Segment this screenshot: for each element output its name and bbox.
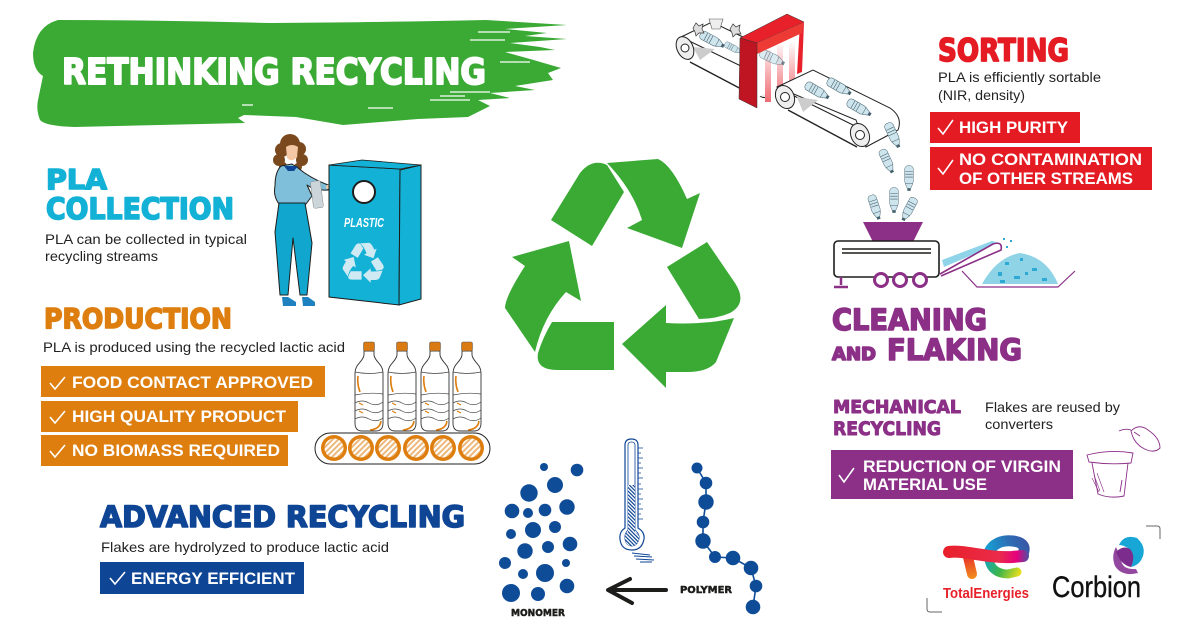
heading: PLA collection — [46, 163, 234, 226]
panel: cleaning and flaking — [831, 303, 1120, 499]
badge: no contamination: OF OTHER STREAMS — [959, 169, 1133, 188]
icon: small recycling symbol — [343, 243, 384, 283]
bottles: moving on second belt and falling — [803, 77, 919, 222]
diagram: polymer chain — [680, 462, 762, 614]
text: Corbion wordmark: Corbion — [1052, 571, 1141, 604]
heading: advanced recycling: ADVANCED RECYCLING — [100, 500, 465, 534]
illustration: sorting conveyor — [673, 14, 919, 222]
heading: cleaning and flaking: AND — [832, 344, 876, 365]
text: plastic label: PLASTIC — [344, 215, 384, 230]
text: production description: PLA is produced using the recycled lactic acid — [43, 339, 345, 355]
heading: rethinking recycling: RETHINKING RECYCLING — [62, 52, 486, 93]
icon: thermometer — [620, 439, 654, 562]
text: mechanical recycling description — [985, 399, 1120, 432]
text: TotalEnergies wordmark: TotalEnergies — [943, 585, 1029, 602]
badge: high purity — [930, 112, 1080, 143]
text: sorting description: PLA is efficiently sortable — [938, 69, 1101, 85]
badge: high quality product — [41, 401, 298, 432]
badge: energy efficient: ENERGY EFFICIENT — [131, 569, 296, 588]
badge: no contamination — [930, 147, 1152, 190]
logo: TotalEnergies — [943, 541, 1029, 602]
badge: reduction of virgin material use — [831, 450, 1073, 499]
badge: reduction of virgin material use: MATERIAL USE — [863, 475, 987, 494]
panel: PLA collection — [45, 163, 247, 264]
heading: sorting: SORTING — [938, 33, 1069, 69]
badge: no biomass required — [41, 435, 288, 466]
text: polymer label: POLYMER — [680, 585, 732, 596]
text: collection description — [45, 231, 247, 264]
badge: no biomass required: NO BIOMASS REQUIRED — [72, 441, 280, 460]
badge: food contact approved: FOOD CONTACT APPROVED — [72, 373, 313, 392]
text: sorting description: (NIR, density) — [938, 87, 1025, 103]
heading: PLA collection: PLA — [46, 163, 107, 196]
badge: energy efficient — [100, 562, 304, 594]
text: advanced recycling description: Flakes are hydrolyzed to produce lactic acid — [101, 539, 389, 555]
conveyor: second belt — [772, 70, 899, 150]
icon: computer mouse — [1119, 427, 1160, 451]
heading: mechanical recycling: MECHANICAL — [833, 397, 961, 418]
illustration: bottles on conveyor — [315, 342, 490, 464]
panel: production — [41, 302, 345, 466]
icon: flower pot — [1087, 451, 1133, 497]
heading: mechanical recycling — [833, 397, 961, 440]
text: monomer label: MONOMER — [511, 608, 565, 619]
panel: sorting — [930, 33, 1152, 190]
text: sorting description — [938, 69, 1101, 103]
conveyor: first belt — [673, 22, 773, 100]
heading: cleaning and flaking: FLAKING — [887, 333, 1022, 367]
diagram: monomer molecules — [499, 463, 583, 619]
illustration: woman recycling — [273, 134, 334, 306]
arrow: polymer to monomer — [608, 579, 666, 603]
badge: high purity: HIGH PURITY — [959, 118, 1069, 137]
text: collection description: PLA can be collected in typical — [45, 231, 247, 247]
badge: no contamination: NO CONTAMINATION — [959, 150, 1142, 169]
badge: food contact approved — [41, 366, 325, 397]
heading: PLA collection: COLLECTION — [46, 192, 234, 226]
text: mechanical recycling description: converters — [985, 416, 1053, 432]
heading: cleaning and flaking: CLEANING — [832, 303, 987, 337]
scanner: red portal — [739, 14, 804, 108]
central recycling symbol — [505, 159, 740, 388]
badge: reduction of virgin material use: REDUCTION OF VIRGIN — [863, 457, 1061, 476]
heading: mechanical recycling: RECYCLING — [833, 418, 941, 440]
corner brackets — [927, 526, 1160, 612]
heading: production: PRODUCTION — [44, 302, 232, 335]
text: collection description: recycling streams — [45, 248, 158, 264]
badge: high quality product: HIGH QUALITY PRODUCT — [72, 407, 287, 426]
panel: advanced recycling — [100, 500, 465, 594]
heading: cleaning and flaking — [832, 303, 1022, 367]
text: mechanical recycling description: Flakes are reused by — [985, 399, 1120, 415]
illustration: flaking machine — [834, 222, 1075, 287]
logo: Corbion — [1052, 537, 1144, 604]
illustration: plastic recycling bin — [329, 160, 421, 305]
title banner: green brush stroke — [33, 20, 567, 127]
